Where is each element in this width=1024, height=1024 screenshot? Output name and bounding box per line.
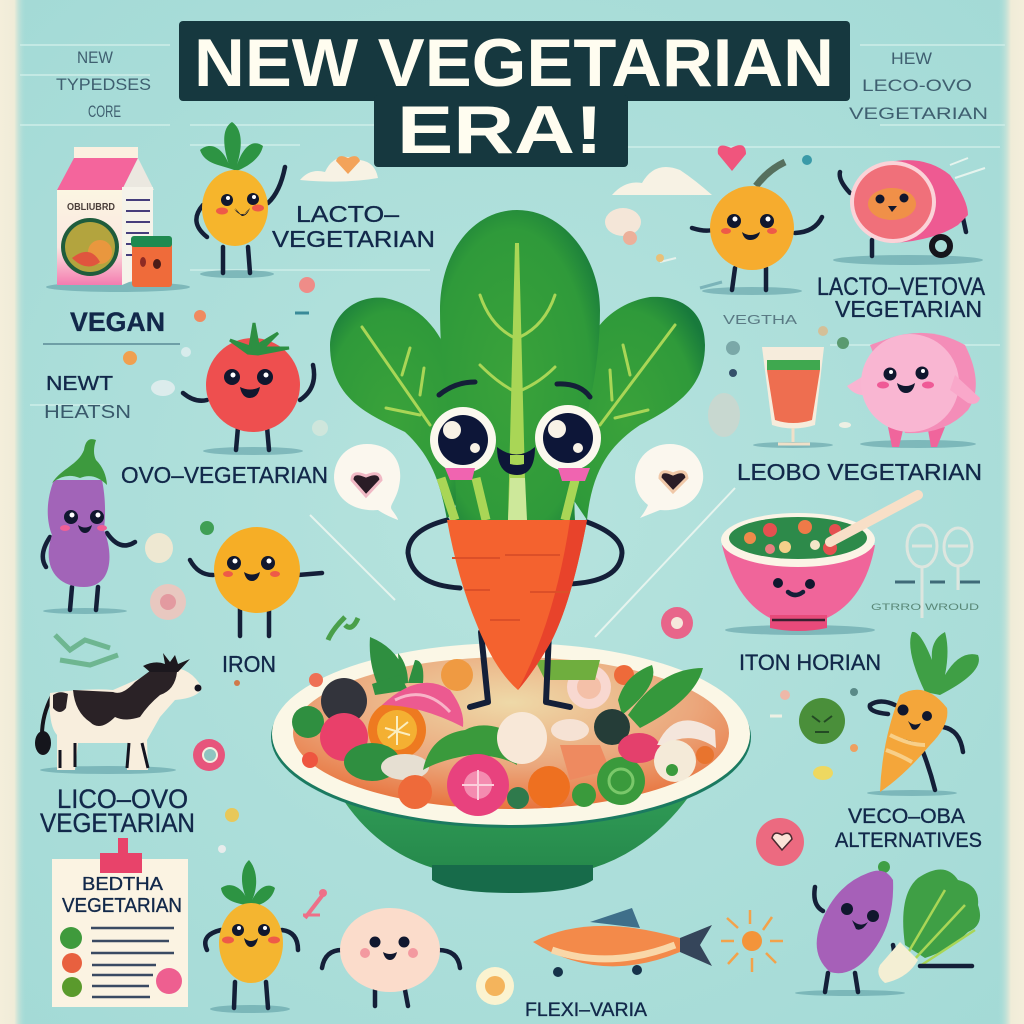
soup [293,657,729,809]
character: yellow orange [190,527,322,636]
corner note left: NEW [77,48,113,67]
icon: milk carton: OBLIUBRD [67,202,115,213]
corner note left: CORE [88,102,121,121]
right ingredients [597,757,645,805]
label: veco-oba alternatives: VECO–OBA [848,805,965,828]
checklist card [52,838,188,1007]
icon: small ring [661,607,693,639]
character: eggplant right [795,861,905,996]
icon: pink badge [756,818,804,866]
character: pale dumpling [322,908,460,1006]
corner note right [849,49,988,123]
pointer line right [595,488,735,637]
hero centre leaf [440,210,600,520]
bowl body [340,795,690,868]
title banner: NEW VEGETARIAN [194,25,834,101]
note left: HEATSN [44,402,131,422]
label: lacto-ovo vegetarian: LICO–OVO [57,784,188,814]
label: vegan: VEGAN [70,307,165,337]
centre ingredients [497,712,547,764]
bowl rim [272,643,750,825]
label: lacto-vegetarian: LACTO– [296,201,399,227]
character: pink pig [847,333,980,448]
hero arms [408,520,622,588]
character: carrot right [867,632,979,796]
hero left leaf [330,298,470,520]
scattered decorations lower right [770,688,858,780]
icon: cloud heart left [300,156,378,182]
pink salad bowl [721,495,918,635]
hero carrot [447,520,587,690]
label: veco-oba alternatives [835,805,982,852]
character: cow [35,653,202,774]
icon: glass of juice [753,347,833,448]
small decoration [218,808,239,853]
hero legs [470,632,570,707]
icon: ring [193,739,225,771]
small caption: GTRRO WROUD [871,602,980,612]
label: lacto-ovo vegetarian [40,784,195,838]
label: flexi-varian: FLEXI–VARIA [525,1000,647,1021]
character: yellow pineapple bottom [205,860,298,1013]
corner note left: TYPEDSES [56,75,151,94]
scattered decorations left [55,277,358,686]
speech bubble right [635,444,703,518]
icon: bok choy [878,869,980,983]
note left: NEWT [46,373,113,395]
speech bubble left [334,444,400,520]
label: lacto-vegetarian [272,201,435,252]
hero right leaf [560,297,705,520]
label: lacto-ovo vegetarian: VEGETARIAN [40,808,195,838]
pointer line left [310,515,395,600]
icon: cloud right [612,167,712,195]
character: ham [833,158,985,265]
character: orange ball [692,162,822,295]
corner note right: LECO-OVO [862,76,972,95]
icon: whisks [895,525,980,618]
salad bowl [271,637,751,893]
label: leobo vegetarian: LEOBO VEGETARIAN [737,459,982,485]
corner note left [56,48,151,121]
checklist card: VEGETARIAN [62,895,182,917]
label: veco-oba alternatives: ALTERNATIVES [835,829,982,852]
icon: heart [718,145,746,171]
left greens [370,637,423,690]
title banner: ERA! [397,92,603,168]
title banner [179,21,850,168]
small label: VEGTHA [723,312,797,327]
label: lacto-vegova vegetarian: LACTO–VETOVA [817,273,985,301]
label: iron horian: ITON HORIAN [739,650,881,675]
label: lacto-vegova vegetarian [817,273,985,322]
icon: fish [533,908,712,977]
icon: sun [721,910,783,972]
bowl base [432,865,593,893]
label: ovo-vegetarian: OVO–VEGETARIAN [121,462,328,488]
corner note right: VEGETARIAN [849,104,988,123]
icon: coin [476,967,514,1005]
character: eggplant [43,439,135,614]
note left [44,373,131,422]
corner note right: HEW [891,49,932,68]
label: lacto-vegova vegetarian: VEGETARIAN [835,296,982,322]
icon: milk carton [46,147,190,292]
scattered decorations centre right [605,208,722,288]
small pink decoration [303,889,327,918]
small green character [799,698,845,744]
scattered decorations right [708,155,851,437]
character: tomato [183,323,314,455]
hero eyes [430,407,496,473]
label: lacto-vegetarian: VEGETARIAN [272,226,435,252]
checklist card: BEDTHA [82,874,163,894]
hero character: leaf and carrot [330,210,705,707]
character: yellow pineapple [196,122,285,278]
label: iron: IRON [222,651,276,677]
